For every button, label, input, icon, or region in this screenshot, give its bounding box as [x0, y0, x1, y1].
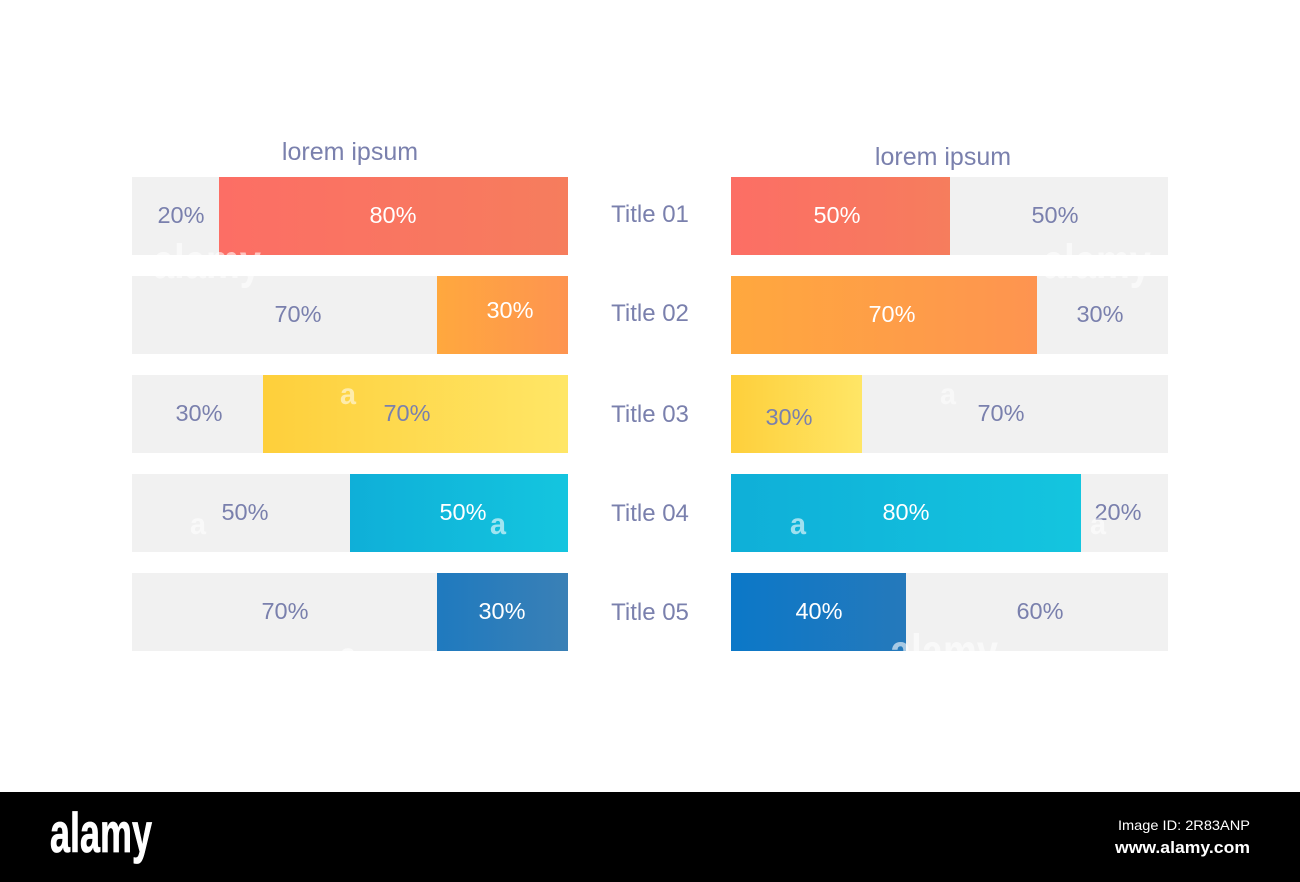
- right row 2 bar: 70%: [868, 301, 916, 327]
- left row 1 bar: [132, 177, 568, 255]
- right row 4 bar: 20%: [1094, 499, 1142, 525]
- left row 5 bar: 30%: [478, 598, 526, 624]
- left row 3 bar: 30%: [175, 400, 223, 426]
- right row 5 bar: [731, 573, 1168, 651]
- footer image id: Image ID: 2R83ANP: [1118, 817, 1250, 833]
- watermark overlays: a: [1090, 508, 1106, 541]
- watermark overlays: alamy: [153, 236, 261, 289]
- right row 2 bar: 30%: [1076, 301, 1124, 327]
- left row 5 bar: [132, 573, 568, 651]
- heading: left column: lorem ipsum: [282, 138, 418, 166]
- left row 4 bar: 50%: [221, 499, 269, 525]
- watermark overlays: a: [790, 508, 806, 541]
- left row 2 bar: 70%: [274, 301, 322, 327]
- row title 01: Title 01: [611, 201, 689, 228]
- watermark overlays: alamy: [890, 626, 998, 679]
- left row 4 bar: 50%: [439, 499, 487, 525]
- left row 1 bar: 20%: [157, 202, 205, 228]
- right row 4 bar: [731, 474, 1168, 552]
- left row 3 bar: [132, 375, 568, 453]
- right row 5 bar: 60%: [1016, 598, 1064, 624]
- left row 2 bar: 30%: [486, 297, 534, 323]
- heading: right column: lorem ipsum: [875, 143, 1011, 171]
- right row 2 bar: [731, 276, 1168, 354]
- watermark overlays: [219, 252, 1103, 651]
- row title 02: Title 02: [611, 300, 689, 327]
- watermark overlays: alamy: [1043, 236, 1151, 289]
- watermark overlays: a: [190, 508, 206, 541]
- watermark overlays: a: [340, 378, 356, 411]
- footer logo: alamy: [50, 801, 152, 864]
- left row 3 bar: 70%: [383, 400, 431, 426]
- left row 5 bar: 70%: [261, 598, 309, 624]
- watermark overlays: a: [490, 508, 506, 541]
- right row 1 bar: 50%: [1031, 202, 1079, 228]
- left row 4 bar: [132, 474, 568, 552]
- right row 5 bar: 40%: [795, 598, 843, 624]
- left row 1 bar: 80%: [369, 202, 417, 228]
- row title 03: Title 03: [611, 401, 689, 428]
- watermark overlays: a: [940, 378, 956, 411]
- left row 2 bar: [132, 276, 568, 354]
- right row 3 bar: 30%: [765, 404, 813, 430]
- right row 1 bar: 50%: [813, 202, 861, 228]
- row title 04: Title 04: [611, 500, 689, 527]
- right row 3 bar: [731, 375, 1168, 453]
- right row 1 bar: [731, 177, 1168, 255]
- right row 3 bar: 70%: [977, 400, 1025, 426]
- right row 4 bar: 80%: [882, 499, 930, 525]
- footer banner: [0, 792, 1300, 882]
- watermark overlays: a: [790, 247, 806, 280]
- watermark overlays: a: [490, 247, 506, 280]
- row title 05: Title 05: [611, 599, 689, 626]
- watermark overlays: a: [340, 638, 356, 671]
- footer website: www.alamy.com: [1114, 838, 1250, 857]
